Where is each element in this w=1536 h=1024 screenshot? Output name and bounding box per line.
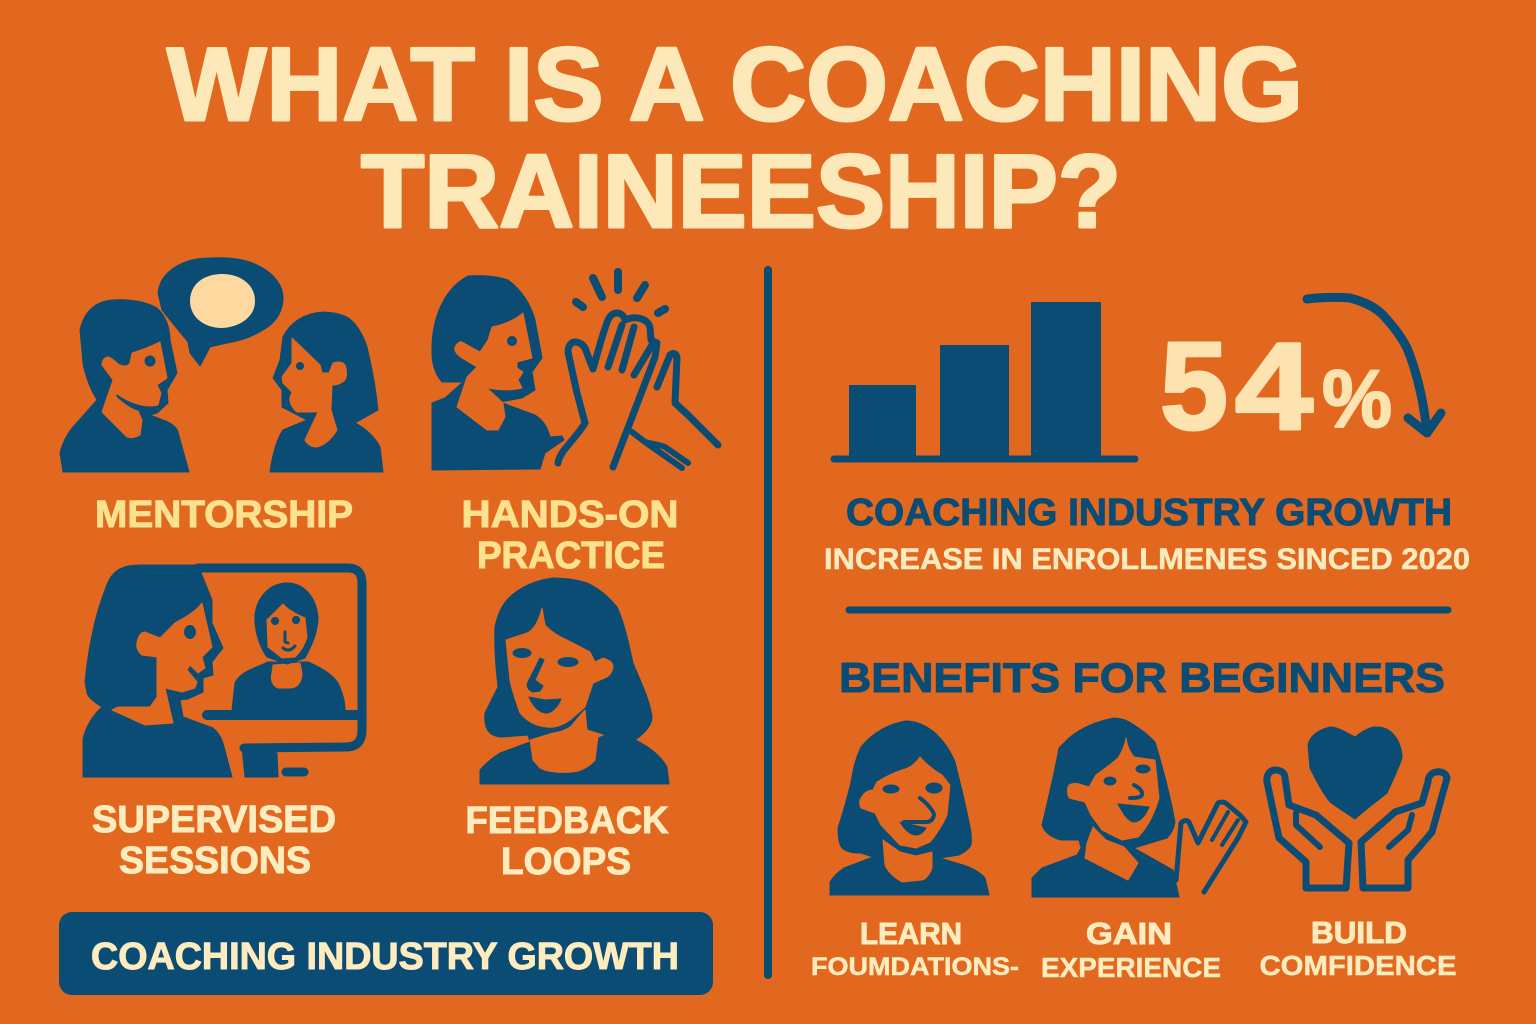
label: build confidence: COMFIDENCE: [1260, 950, 1456, 981]
label: hands-on practice: HANDS-ON: [462, 494, 678, 536]
label: learn foundations: FOUMDATIONS-: [811, 953, 1019, 981]
label: feedback loops: FEEDBACK: [466, 800, 669, 842]
bar chart: [834, 302, 1135, 460]
title: TRAINEESHIP?: [361, 134, 1121, 250]
label: feedback loops: LOOPS: [501, 841, 631, 883]
label: feedback loops: [466, 800, 669, 883]
icon: learn, smiling woman: [830, 721, 989, 895]
woman: [270, 312, 383, 472]
label: gain experience: [1041, 916, 1221, 983]
arrow: curved down: [1307, 297, 1441, 433]
icon: hands-on practice, high five: [432, 272, 718, 470]
banner: coaching industry growth: COACHING INDUSTRY GROWTH: [91, 936, 679, 978]
icon: feedback, woman portrait: [480, 578, 669, 784]
subheading: increase in enrollments: INCREASE IN ENROLLMENES SINCED 2020: [824, 543, 1470, 576]
icon: mentorship, two people talking: [60, 258, 383, 472]
label: supervised sessions: [92, 799, 336, 882]
title: [167, 27, 1303, 250]
man: [60, 300, 189, 472]
stat: 54%: %: [1322, 354, 1392, 445]
label: build confidence: BUILD: [1311, 915, 1407, 950]
icon: supervised session on monitor: [83, 565, 362, 777]
label: hands-on practice: PRACTICE: [477, 535, 665, 577]
label: supervised sessions: SESSIONS: [119, 840, 311, 882]
heading: coaching industry growth: COACHING INDUSTRY GROWTH: [846, 492, 1452, 534]
label: gain experience: GAIN: [1086, 916, 1172, 951]
stat: 54%: [1160, 318, 1392, 456]
label: learn foundations: LEARN: [860, 916, 962, 951]
vertical divider: [764, 270, 772, 975]
label: gain experience: EXPERIENCE: [1041, 952, 1221, 983]
label: learn foundations: [811, 916, 1019, 981]
banner: coaching industry growth: [59, 912, 713, 995]
icon: gain experience, woman waving: [1032, 718, 1246, 897]
heading: benefits for beginners: BENEFITS FOR BEGINNERS: [839, 654, 1445, 701]
label: build confidence: [1260, 915, 1456, 981]
label: supervised sessions: SUPERVISED: [92, 799, 336, 841]
horizontal divider: [849, 606, 1448, 614]
stat: 54%: 4: [1235, 318, 1313, 456]
icon: build confidence, heart in hands: [1267, 727, 1447, 888]
title: WHAT IS A COACHING: [167, 27, 1303, 143]
label: hands-on practice: [462, 494, 678, 577]
stat: 54%: 5: [1160, 318, 1228, 456]
icon: speech bubble: [158, 258, 283, 366]
label: mentorship: MENTORSHIP: [95, 494, 353, 536]
